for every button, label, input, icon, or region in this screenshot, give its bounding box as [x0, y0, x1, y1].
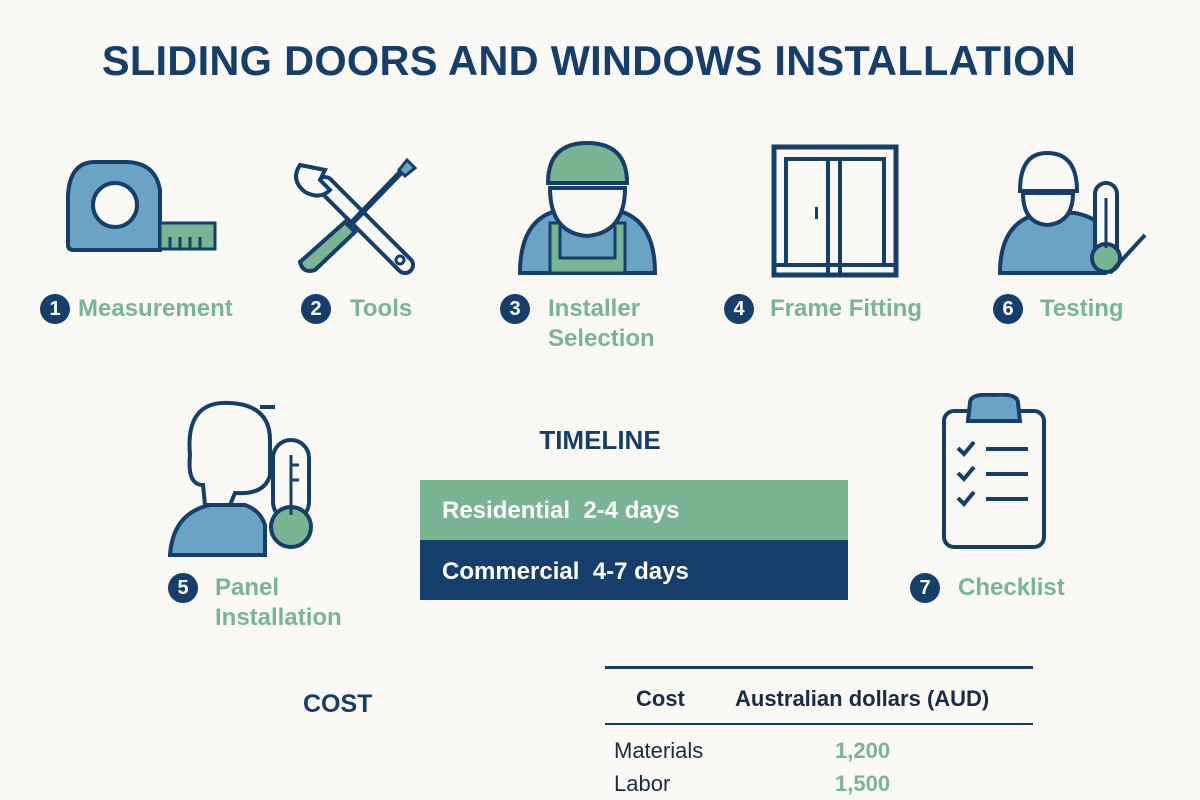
step 7 label: 7 — [919, 577, 931, 599]
step 5 label: Installation — [215, 604, 342, 631]
step 3 label: 3 — [509, 298, 521, 320]
cost table — [605, 666, 1033, 796]
step 6 label: Testing — [1040, 295, 1124, 322]
icon: testing person with thermometer — [998, 151, 1146, 275]
cost table: 1,200 — [835, 738, 890, 763]
step 1 label: 1 — [49, 298, 61, 320]
step 2 label: Tools — [350, 295, 412, 322]
step 5 label — [168, 573, 342, 631]
step 3 label — [500, 294, 655, 352]
title: SLIDING DOORS AND WINDOWS INSTALLATION — [102, 37, 1076, 84]
bar: commercial: Commercial 4-7 days — [442, 558, 689, 585]
step 4 label — [724, 294, 922, 324]
step 6 label: 6 — [1002, 298, 1014, 320]
step 7 label — [910, 573, 1065, 603]
step 5 label: 5 — [177, 577, 189, 599]
step 4 label: Frame Fitting — [770, 295, 922, 322]
step 5 label: Panel — [215, 574, 279, 601]
cost table: Labor — [614, 771, 670, 796]
step 4 label: 4 — [733, 298, 745, 320]
cost table: Australian dollars (AUD) — [735, 686, 989, 711]
step 7 label: Checklist — [958, 574, 1065, 601]
bar: commercial — [420, 540, 848, 600]
cost table: Cost — [636, 686, 685, 711]
step 3 label: Installer — [548, 295, 640, 322]
timeline heading: TIMELINE — [539, 425, 661, 455]
bar: residential — [420, 480, 848, 540]
step 3 label: Selection — [548, 325, 655, 352]
icon: panel installation person — [168, 400, 313, 557]
icon: tools — [294, 158, 418, 275]
icon: checklist — [942, 393, 1046, 549]
step 2 label — [301, 294, 412, 324]
step 1 label: Measurement — [78, 295, 233, 322]
timeline bars — [420, 480, 848, 600]
step 2 label: 2 — [310, 298, 322, 320]
bar: residential: Residential 2-4 days — [442, 497, 679, 524]
icon: sliding door frame — [772, 144, 898, 278]
icon: installer — [518, 141, 657, 275]
cost heading: COST — [303, 690, 372, 718]
cost table: Materials — [614, 738, 703, 763]
step 6 label — [993, 294, 1124, 324]
icon: tape measure — [66, 160, 216, 252]
cost table: 1,500 — [835, 771, 890, 796]
